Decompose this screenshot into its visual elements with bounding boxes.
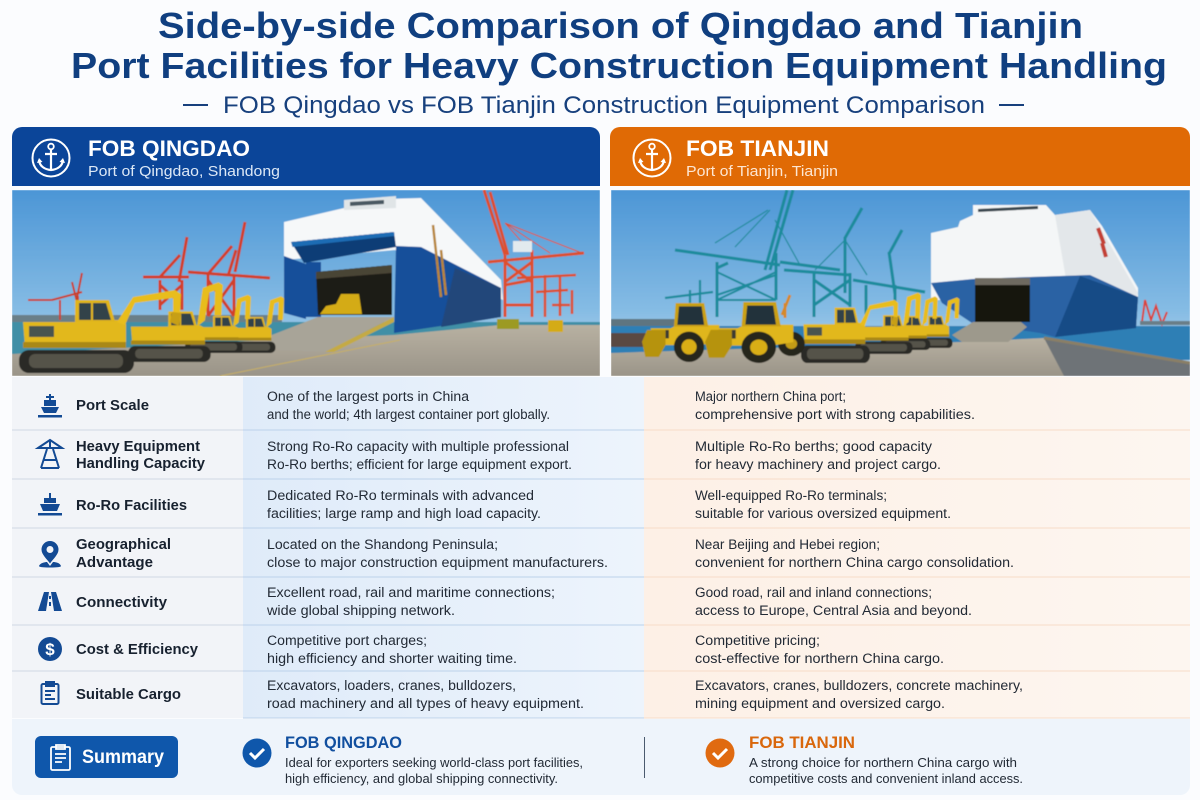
ramp <box>271 316 394 340</box>
row: Connectivity: access to Europe, Central Asia and beyond. <box>695 603 972 618</box>
summary: FOB Tianjin: FOB TIANJIN <box>749 733 855 752</box>
row: Ro-Ro Facilities: facilities; large ramp and high load capacity. <box>267 506 541 521</box>
row: Port Scale: Major northern China port; <box>695 389 846 404</box>
distant orange and red cranes <box>782 295 790 318</box>
row: Heavy Equipment Handling Capacity: Strong Ro-Ro capacity with multiple professional <box>267 439 569 454</box>
title: Side-by-side Comparison of Qingdao and Tianjin <box>158 5 1083 46</box>
row: Heavy Equipment Handling Capacity: Ro-Ro berths; efficient for large equipment export. <box>267 457 572 472</box>
icon: dollar coin: $ <box>45 640 55 659</box>
title <box>71 5 1167 86</box>
subtitle: FOB Qingdao vs FOB Tianjin Construction Equipment Comparison <box>223 92 985 119</box>
row: Port Scale: comprehensive port with strong capabilities. <box>695 407 975 422</box>
summary: FOB Qingdao <box>242 733 583 786</box>
distant red cranes <box>28 273 82 320</box>
row: Connectivity: wide global shipping network. <box>266 603 455 618</box>
row: Geographical Advantage: Advantage <box>76 555 153 571</box>
excavators <box>905 297 959 348</box>
big red cranes <box>484 190 584 317</box>
row: Heavy Equipment Handling Capacity: Heavy Equipment <box>76 439 200 455</box>
row: Suitable Cargo <box>42 678 1023 711</box>
row: Port Scale: Port Scale <box>76 398 149 414</box>
row: Port Scale: and the world; 4th largest container port globally. <box>267 407 550 422</box>
row: Suitable Cargo: Excavators, loaders, cranes, bulldozers, <box>267 678 516 693</box>
icon: anchor <box>32 140 70 176</box>
row: Suitable Cargo: Suitable Cargo <box>76 687 181 703</box>
row: Port Scale <box>38 389 975 422</box>
summary: FOB Qingdao: FOB QINGDAO <box>285 733 402 752</box>
icon: clipboard <box>42 682 58 704</box>
panel header: FOB Tianjin: FOB TIANJIN <box>686 136 829 161</box>
summary: FOB Qingdao: Ideal for exporters seeking world-class port facilities, <box>285 756 583 770</box>
small vehicles <box>497 319 519 329</box>
row: Geographical Advantage: close to major construction equipment manufacturers. <box>267 555 608 570</box>
row: Suitable Cargo: mining equipment and oversized cargo. <box>695 696 945 711</box>
panel header: FOB Qingdao: Port of Qingdao, Shandong <box>88 163 280 180</box>
ramp <box>952 322 1027 342</box>
row: Suitable Cargo: Excavators, cranes, bulldozers, concrete machinery, <box>695 678 1023 693</box>
row: Cost and Efficiency <box>38 633 944 666</box>
row: Geographical Advantage: Geographical <box>76 537 171 553</box>
row: Connectivity <box>38 585 972 618</box>
row: Ro-Ro Facilities: Dedicated Ro-Ro terminals with advanced <box>267 488 534 503</box>
excavators <box>218 296 284 353</box>
row: Geographical Advantage: convenient for northern China cargo consolidation. <box>695 555 1014 570</box>
icon: clipboard <box>51 745 70 770</box>
icon: road <box>38 592 62 611</box>
comparison table background <box>12 377 1190 718</box>
summary button <box>35 736 178 778</box>
summary panel <box>12 719 1190 795</box>
row: Heavy Equipment Handling Capacity <box>38 439 941 472</box>
icon: anchor <box>634 140 670 176</box>
summary button: Summary <box>82 747 164 768</box>
panel header: FOB Tianjin: Port of Tianjin, Tianjin <box>686 163 838 180</box>
photo: Tianjin port with Ro-Ro ship and loaders <box>611 190 1190 376</box>
row: Connectivity: Excellent road, rail and maritime connections; <box>267 585 555 600</box>
row: Connectivity: Connectivity <box>76 595 167 611</box>
icon: location pin <box>39 541 61 568</box>
row: Ro-Ro Facilities <box>38 488 951 521</box>
row: Cost and Efficiency: Competitive port charges; <box>267 633 427 648</box>
row: Geographical Advantage <box>39 537 1014 571</box>
panel header: FOB Qingdao: FOB QINGDAO <box>88 136 250 161</box>
photo: Qingdao port with Ro-Ro ship and excavators <box>12 190 600 376</box>
row: Port Scale: One of the largest ports in China <box>267 389 470 404</box>
summary: FOB Qingdao: high efficiency, and global shipping connectivity. <box>285 772 558 786</box>
Ro-Ro ship <box>931 205 1138 300</box>
row: Heavy Equipment Handling Capacity: for heavy machinery and project cargo. <box>695 457 941 472</box>
row: Suitable Cargo: road machinery and all types of heavy equipment. <box>267 696 584 711</box>
row: Ro-Ro Facilities: Ro-Ro Facilities <box>76 498 187 514</box>
row: Heavy Equipment Handling Capacity: Handling Capacity <box>76 456 205 472</box>
icon: dollar coin <box>38 637 62 661</box>
row: Ro-Ro Facilities: suitable for various oversized equipment. <box>695 506 951 521</box>
icon: gantry crane <box>38 440 62 468</box>
summary: FOB Tianjin: competitive costs and convenient inland access. <box>749 772 1023 786</box>
wheel loaders <box>642 303 729 362</box>
row: Heavy Equipment Handling Capacity: Multiple Ro-Ro berths; good capacity <box>695 439 932 454</box>
panel header: FOB Qingdao <box>12 127 600 186</box>
summary: FOB Tianjin <box>706 733 1023 786</box>
row: Cost and Efficiency: Competitive pricing; <box>695 633 820 648</box>
title: Port Facilities for Heavy Construction Equipment Handling <box>71 45 1167 86</box>
teal cranes <box>675 190 925 317</box>
Ro-Ro ship <box>284 198 503 300</box>
summary: FOB Tianjin: A strong choice for northern China cargo with <box>749 756 1017 770</box>
row: Geographical Advantage: Located on the Shandong Peninsula; <box>267 537 498 552</box>
row: Cost and Efficiency: Cost & Efficiency <box>76 642 198 658</box>
icon: port ship <box>38 394 62 418</box>
panel header: FOB Tianjin <box>610 127 1190 186</box>
row: Cost and Efficiency: cost-effective for northern China cargo. <box>695 651 944 666</box>
row: Cost and Efficiency: high efficiency and shorter waiting time. <box>267 651 517 666</box>
row: Geographical Advantage: Near Beijing and Hebei region; <box>695 537 880 552</box>
row: Connectivity: Good road, rail and inland connections; <box>695 585 932 600</box>
row: Ro-Ro Facilities: Well-equipped Ro-Ro terminals; <box>695 488 887 503</box>
icon: ro-ro ship <box>38 493 62 516</box>
